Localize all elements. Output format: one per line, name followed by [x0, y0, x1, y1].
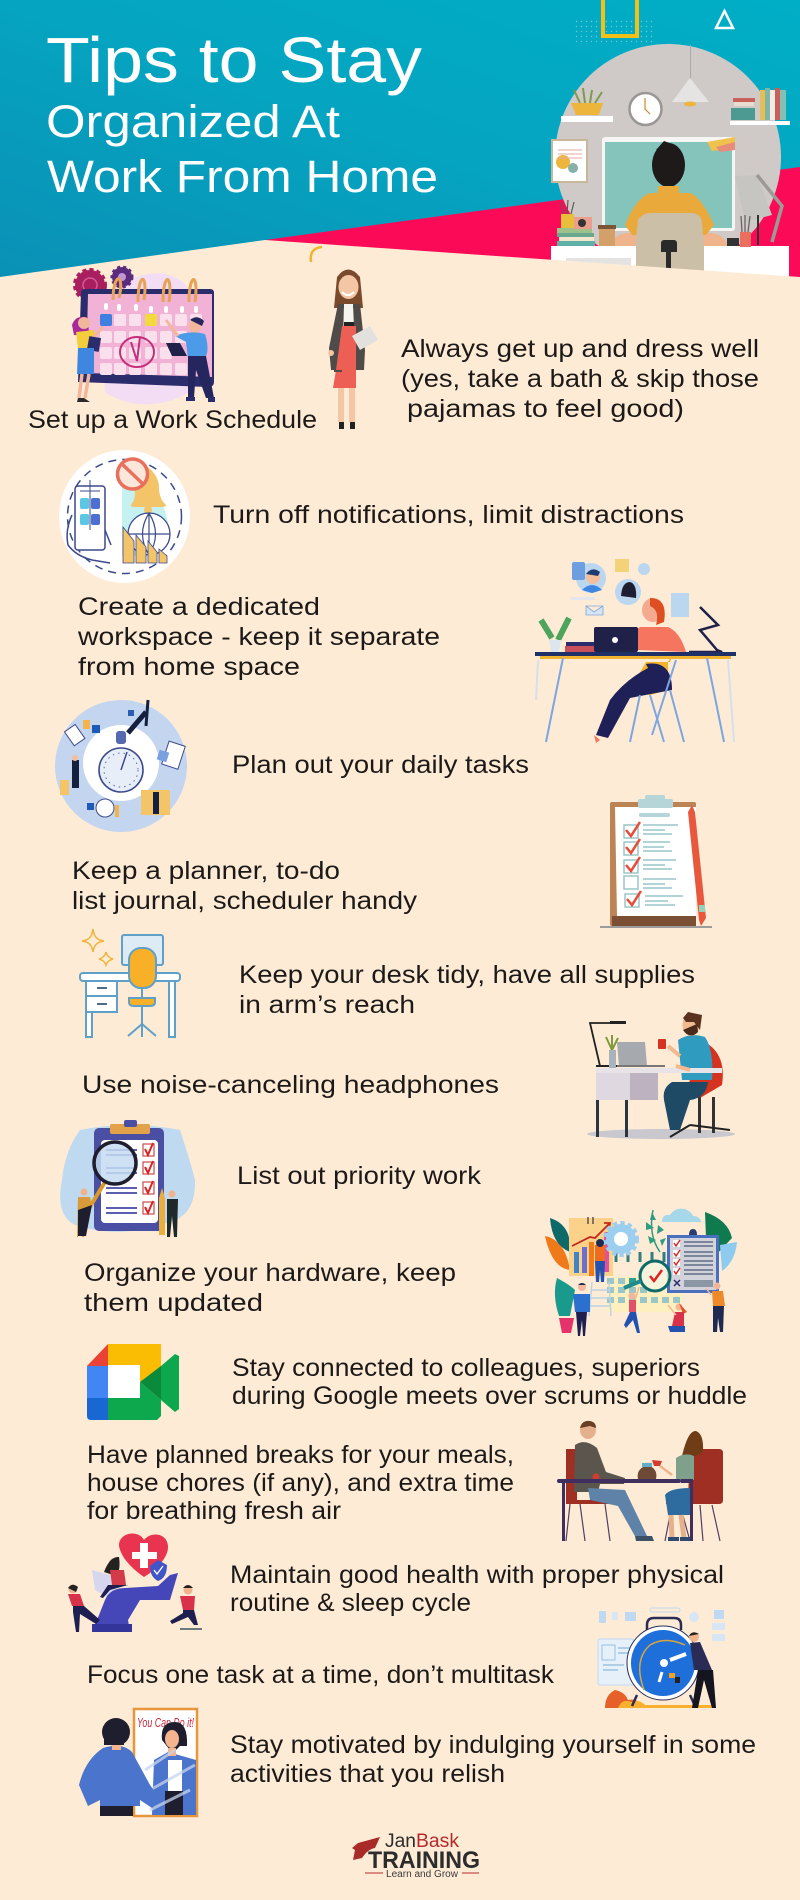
text: mirror note: You Can Do it!	[137, 1715, 194, 1730]
icon: health heart and hand	[68, 1534, 202, 1632]
icon: triangle	[716, 11, 733, 28]
logo: JanBask Training: TRAINING	[368, 1847, 480, 1874]
text: dedicated workspace: from home space	[78, 653, 300, 681]
logo: JanBask Training	[352, 1831, 480, 1880]
illustration: alarm clock with man	[598, 1608, 725, 1708]
text: always get up: (yes, take a bath & skip those	[401, 365, 759, 393]
text: always get up: pajamas to feel good)	[407, 395, 684, 423]
text: always get up: Always get up and dress well	[401, 335, 759, 363]
icon: notifications circle	[59, 450, 190, 583]
text: dedicated workspace: Create a dedicated	[78, 593, 320, 621]
text: organize your hardware: them updated	[84, 1289, 263, 1317]
icon: priority clipboard with magnifier	[60, 1120, 195, 1237]
logo: JanBask Training: Jan	[385, 1831, 416, 1852]
text: keep a planner: list journal, scheduler handy	[72, 887, 418, 915]
text: planned breaks: house chores (if any), and extra time	[87, 1469, 514, 1497]
illustration: woman at desk with video calls	[535, 559, 736, 743]
illustration: person at home desk	[551, 44, 790, 282]
text: planned breaks: for breathing fresh air	[87, 1497, 341, 1525]
illustration: couple at table	[557, 1421, 723, 1541]
icon: yellow frame	[603, 0, 637, 36]
text: organize your hardware: Organize your hardware, keep	[84, 1259, 456, 1287]
text: maintain good health	[230, 1561, 724, 1617]
text: noise-canceling headphones: Use noise-canceling headphones	[82, 1071, 499, 1099]
icon: tidy desk and chair	[80, 929, 180, 1037]
title: Work From Home	[47, 151, 438, 202]
icon: stopwatch with people	[55, 700, 187, 832]
text: planned breaks	[87, 1441, 514, 1525]
text: dedicated workspace	[77, 593, 440, 681]
text: stay connected: Stay connected to colleagues, superiors	[232, 1354, 700, 1382]
text: keep desk tidy	[239, 961, 695, 1019]
text: stay motivated	[230, 1731, 756, 1788]
text: plan daily tasks: Plan out your daily tasks	[232, 751, 529, 779]
text: maintain good health: Maintain good health with proper physical	[230, 1561, 724, 1589]
text: stay motivated: Stay motivated by indulging yourself in some	[230, 1731, 756, 1759]
title	[46, 24, 438, 202]
title: Organized At	[46, 96, 341, 147]
illustration: team with charts and checklist	[545, 1209, 737, 1336]
icon: yellow arc	[311, 247, 322, 262]
icon: clipboard checklist	[600, 795, 712, 928]
logo: JanBask Training: Bask	[416, 1831, 459, 1852]
text: keep a planner: Keep a planner, to-do	[72, 857, 340, 885]
text: stay connected: during Google meets over scrums or huddle	[232, 1382, 747, 1410]
text: keep desk tidy: Keep your desk tidy, have all supplies	[239, 961, 695, 989]
text: keep a planner	[72, 857, 418, 915]
header banner	[0, 0, 800, 280]
pink wedge	[265, 167, 800, 280]
text: organize your hardware	[84, 1259, 456, 1317]
illustration: man with headphones at desk	[587, 1012, 735, 1139]
icon: Google Meet logo	[87, 1344, 179, 1420]
icon: standing woman	[328, 270, 378, 429]
decorative dots	[575, 18, 653, 46]
illustration: man at mirror	[79, 1709, 197, 1816]
text: focus one task: Focus one task at a time, don’t multitask	[87, 1661, 555, 1689]
text: turn off notifications: Turn off notifications, limit distractions	[213, 501, 684, 529]
icon: calendar with two people	[72, 267, 215, 404]
text: maintain good health: routine & sleep cycle	[230, 1589, 471, 1617]
text: stay motivated: activities that you relish	[230, 1760, 505, 1788]
text: list out priority work: List out priority work	[237, 1162, 482, 1190]
text: stay connected	[232, 1354, 747, 1410]
title: Tips to Stay	[46, 24, 422, 96]
text: planned breaks: Have planned breaks for your meals,	[87, 1441, 514, 1469]
text: always get up	[401, 335, 759, 423]
text: set up a work schedule: Set up a Work Schedule	[28, 406, 317, 434]
text: keep desk tidy: in arm’s reach	[239, 991, 415, 1019]
logo: JanBask Training: Learn and Grow	[386, 1869, 459, 1880]
text: dedicated workspace: workspace - keep it separate	[77, 623, 440, 651]
